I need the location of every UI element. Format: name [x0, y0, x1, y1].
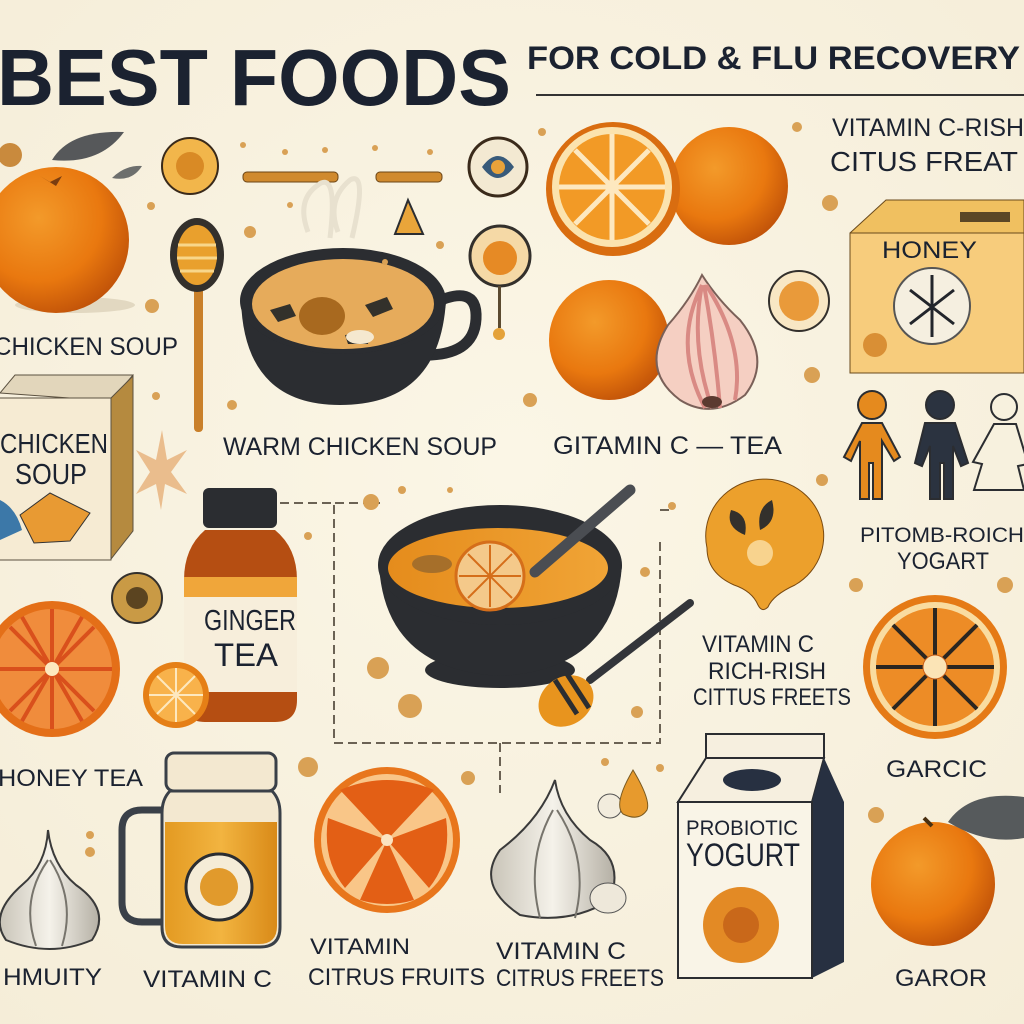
icon: small citrus slice — [769, 271, 829, 331]
label: warm chicken soup: WARM CHICKEN SOUP — [223, 433, 497, 461]
label: vitamin citrus fruits: CITRUS FRUITS — [308, 964, 485, 991]
icon: chicken soup box: CHICKEN — [0, 428, 108, 459]
label: vitamin c rich-rish citrus: RICH-RISH — [708, 658, 826, 685]
icon: orange slice left — [0, 601, 120, 737]
icon: honey drop circle — [706, 479, 824, 610]
icon: central soup bowl — [378, 490, 630, 688]
icon: spice flower — [136, 430, 187, 510]
icon: small badge left — [112, 573, 162, 623]
icon: honey jar mug — [122, 753, 280, 947]
icon: orange and onion — [549, 275, 757, 409]
icon: bar top centre — [243, 172, 442, 182]
label: vitamin c rich citrus: CITUS FREAT — [830, 146, 1018, 177]
label: garcic: GARCIC — [886, 756, 987, 783]
icon: orange slice bottom centre — [314, 767, 460, 913]
icon: chicken soup box — [0, 375, 133, 560]
icon: three people — [844, 391, 1024, 499]
label: vitamin c citrus freets: CITRUS FREETS — [496, 965, 664, 992]
label: vitamin c citrus freets — [496, 938, 664, 992]
icon: ginger tea bottle: GINGER — [204, 605, 296, 637]
label: vitamin c citrus freets: VITAMIN C — [496, 938, 626, 965]
icon: ginger tea bottle: TEA — [214, 637, 279, 673]
label: pitomb-roich yogart — [860, 524, 1024, 575]
title: BEST FOODS — [0, 33, 511, 122]
icon: orange top left — [0, 167, 135, 313]
icon: warm chicken soup cup — [240, 179, 476, 405]
icon: ginger tea bottle — [184, 488, 297, 722]
label: vitamin citrus fruits: VITAMIN — [310, 934, 410, 959]
icon: garlic centre — [491, 770, 648, 918]
icon: leaf top left — [0, 132, 142, 179]
label: honey tea: HONEY TEA — [0, 765, 143, 792]
label: vitamin c rich citrus: VITAMIN C-RISH — [832, 114, 1024, 142]
icon: medallion — [162, 138, 218, 194]
label: pitomb-roich yogart: YOGART — [897, 548, 989, 575]
label: pitomb-roich yogart: PITOMB-ROICH — [860, 524, 1024, 547]
title — [0, 33, 1024, 122]
icon: garlic bottom left — [0, 830, 99, 949]
icon: yogurt carton — [678, 734, 844, 978]
icon: orange slice right — [863, 595, 1007, 739]
icon: honey box — [850, 200, 1024, 373]
label: vitamin c rich-rish citrus: CITTUS FREETS — [693, 684, 851, 711]
icon: triangle and pin — [395, 200, 530, 340]
icon: halved orange and whole orange — [546, 122, 788, 256]
label: hmuity: HMUITY — [3, 964, 102, 991]
icon: orange with leaf — [871, 796, 1024, 946]
label: vitamin c rich-rish citrus: VITAMIN C — [702, 631, 814, 658]
dashed connector — [280, 503, 672, 793]
icon: honey dipper — [528, 603, 690, 737]
icon: yogurt carton: PROBIOTIC — [686, 817, 798, 840]
icon: chicken soup box: SOUP — [15, 459, 87, 491]
icon: honey box: HONEY — [882, 237, 977, 264]
decorative specks — [85, 122, 1013, 857]
icon: badge top centre — [469, 138, 527, 196]
icon: honey spoon — [170, 218, 224, 432]
label: garor: GAROR — [895, 965, 987, 992]
icon: yogurt carton: YOGURT — [686, 837, 800, 873]
icon: orange half beside bottle — [143, 662, 209, 728]
label: vitamin citrus fruits — [308, 934, 485, 991]
title: FOR COLD & FLU RECOVERY — [527, 40, 1020, 76]
label: vitamin c rich-rish citrus — [693, 631, 851, 711]
label: vitamin c: VITAMIN C — [143, 966, 272, 993]
label: gitamin c tea: GITAMIN C — TEA — [553, 432, 782, 460]
label: vitamin c rich citrus — [830, 114, 1024, 177]
